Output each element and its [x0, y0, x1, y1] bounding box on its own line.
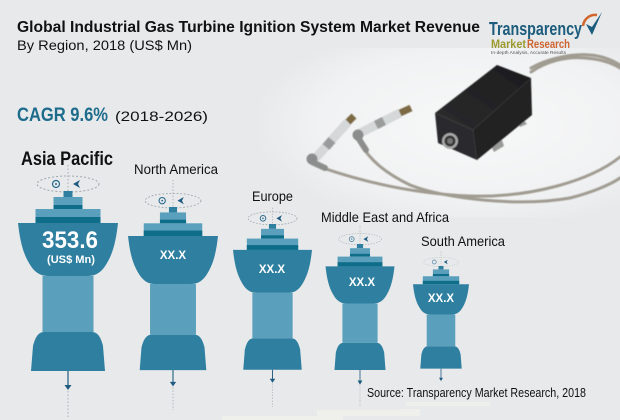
region label: South America — [421, 233, 505, 249]
base — [140, 335, 206, 370]
tower: North America — [128, 161, 218, 410]
CAGR callout — [17, 104, 208, 126]
region label: Asia Pacific — [21, 149, 113, 170]
unit: (US$ Mn) — [47, 254, 95, 266]
tower: Middle East and Africa — [321, 209, 449, 406]
rotation icon — [248, 208, 297, 225]
stacked top — [36, 191, 100, 223]
logo: Research — [527, 39, 570, 51]
value: XX.X — [160, 250, 186, 262]
logo: Market — [491, 39, 526, 51]
column — [427, 314, 455, 346]
region label: Europe — [252, 189, 293, 204]
CAGR callout: CAGR 9.6% — [17, 104, 108, 126]
stacked top — [423, 266, 459, 284]
bottom light strips — [222, 402, 490, 420]
cables — [323, 55, 620, 202]
stacked top — [144, 207, 202, 236]
column — [150, 284, 196, 335]
down arrow — [270, 370, 275, 407]
down arrow — [64, 371, 72, 417]
subtitle: By Region, 2018 (US$ Mn) — [17, 38, 192, 53]
value: 353.6 — [42, 227, 98, 254]
column — [342, 304, 378, 343]
CAGR callout: (2018-2026) — [115, 108, 208, 124]
right sensor — [352, 108, 411, 150]
bowl — [326, 266, 394, 304]
tower: Europe — [233, 189, 312, 407]
bowl — [413, 284, 469, 314]
base — [31, 332, 105, 371]
column — [252, 293, 293, 338]
down arrow — [439, 369, 443, 381]
column — [42, 276, 94, 332]
down arrow — [170, 370, 176, 410]
stacked top — [338, 244, 382, 266]
bowl — [128, 236, 218, 284]
region label: North America — [134, 161, 218, 177]
down arrow — [358, 370, 362, 406]
rotation icon — [339, 226, 381, 245]
value: XX.X — [259, 264, 285, 276]
logo: Transparency — [489, 19, 582, 39]
base — [420, 346, 462, 369]
logo: In-depth Analysis, Accurate Results — [491, 50, 567, 55]
product photo: ignition system — [306, 55, 620, 202]
photo background glow — [260, 48, 620, 218]
connector — [442, 133, 458, 149]
logo — [489, 12, 602, 55]
tower: Asia Pacific — [18, 149, 118, 417]
mounting tabs — [515, 118, 527, 127]
rotation icon — [37, 165, 99, 192]
rotation icon — [145, 180, 201, 208]
value: XX.X — [349, 277, 375, 289]
base — [243, 338, 302, 370]
rotation icon — [424, 251, 458, 267]
base — [334, 343, 386, 370]
left sensor — [306, 116, 354, 168]
title: Global Industrial Gas Turbine Ignition System Market Revenue — [17, 19, 480, 36]
value: XX.X — [428, 293, 454, 305]
black box — [435, 65, 532, 160]
stacked top — [247, 224, 298, 250]
region label: Middle East and Africa — [321, 209, 449, 225]
bowl — [18, 223, 118, 276]
bowl — [233, 250, 312, 293]
tower: South America — [413, 233, 505, 381]
